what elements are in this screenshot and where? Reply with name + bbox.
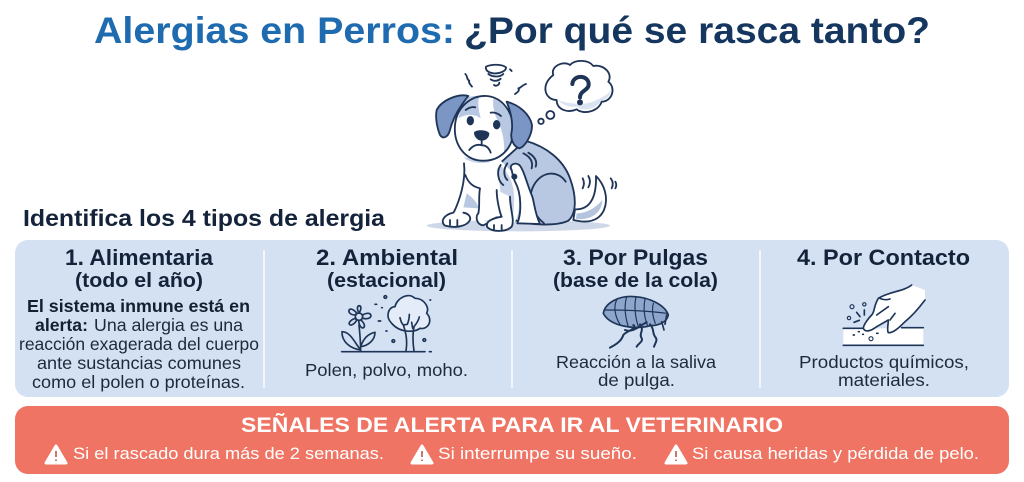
illustration: scratching dog [427, 61, 616, 231]
column 1: alimentaria: El sistema inmune está en [27, 296, 250, 316]
column 2: ambiental [305, 245, 468, 380]
icon: flower and tree [342, 296, 431, 352]
alert heading: SEÑALES DE ALERTA PARA IR AL VETERINARIO [241, 414, 783, 437]
alert 3: Si causa heridas y pérdida de pelo. [692, 444, 979, 463]
column 1: alimentaria: Una alergia es una [94, 315, 243, 335]
title: Alergias en Perros: [94, 10, 455, 51]
column 3: por pulgas: 3. Por Pulgas [563, 245, 708, 270]
column 1: alimentaria: (todo el año) [75, 270, 203, 292]
panel: allergy types [15, 240, 1009, 397]
column 1: alimentaria: como el polen o proteínas. [32, 372, 245, 392]
alert 1: Si el rascado dura más de 2 semanas. [73, 444, 384, 463]
icon: flea [603, 296, 668, 348]
column 3: por pulgas: Reacción a la saliva [556, 352, 716, 372]
title: ¿Por qué se rasca tanto? [464, 10, 930, 51]
column 1: alimentaria: ante sustancias comunes [37, 353, 241, 373]
column 3: por pulgas: de pulga. [598, 370, 675, 390]
column 4: por contacto [797, 245, 970, 390]
column 1: alimentaria: alerta: [35, 315, 88, 335]
column 4: por contacto: materiales. [838, 370, 930, 390]
column 4: por contacto: Productos químicos, [799, 352, 969, 372]
column 2: ambiental: Polen, polvo, moho. [305, 360, 468, 380]
column 1: alimentaria: 1. Alimentaria [65, 245, 214, 270]
panel: alert signs [15, 406, 1009, 474]
title [94, 10, 930, 51]
column 4: por contacto: 4. Por Contacto [797, 245, 970, 270]
column 2: ambiental: 2. Ambiental [316, 245, 458, 270]
alert 2: Si interrumpe su sueño. [438, 444, 637, 463]
icon: hand touching surface [843, 285, 925, 345]
column 1: alimentaria: reacción exagerada del cuerpo [19, 334, 259, 354]
column 3: por pulgas [553, 245, 718, 390]
column 2: ambiental: (estacional) [327, 270, 446, 292]
column 1: alimentaria [19, 245, 259, 392]
column 3: por pulgas: (base de la cola) [553, 270, 718, 292]
subheading: Identifica los 4 tipos de alergia [23, 205, 385, 231]
